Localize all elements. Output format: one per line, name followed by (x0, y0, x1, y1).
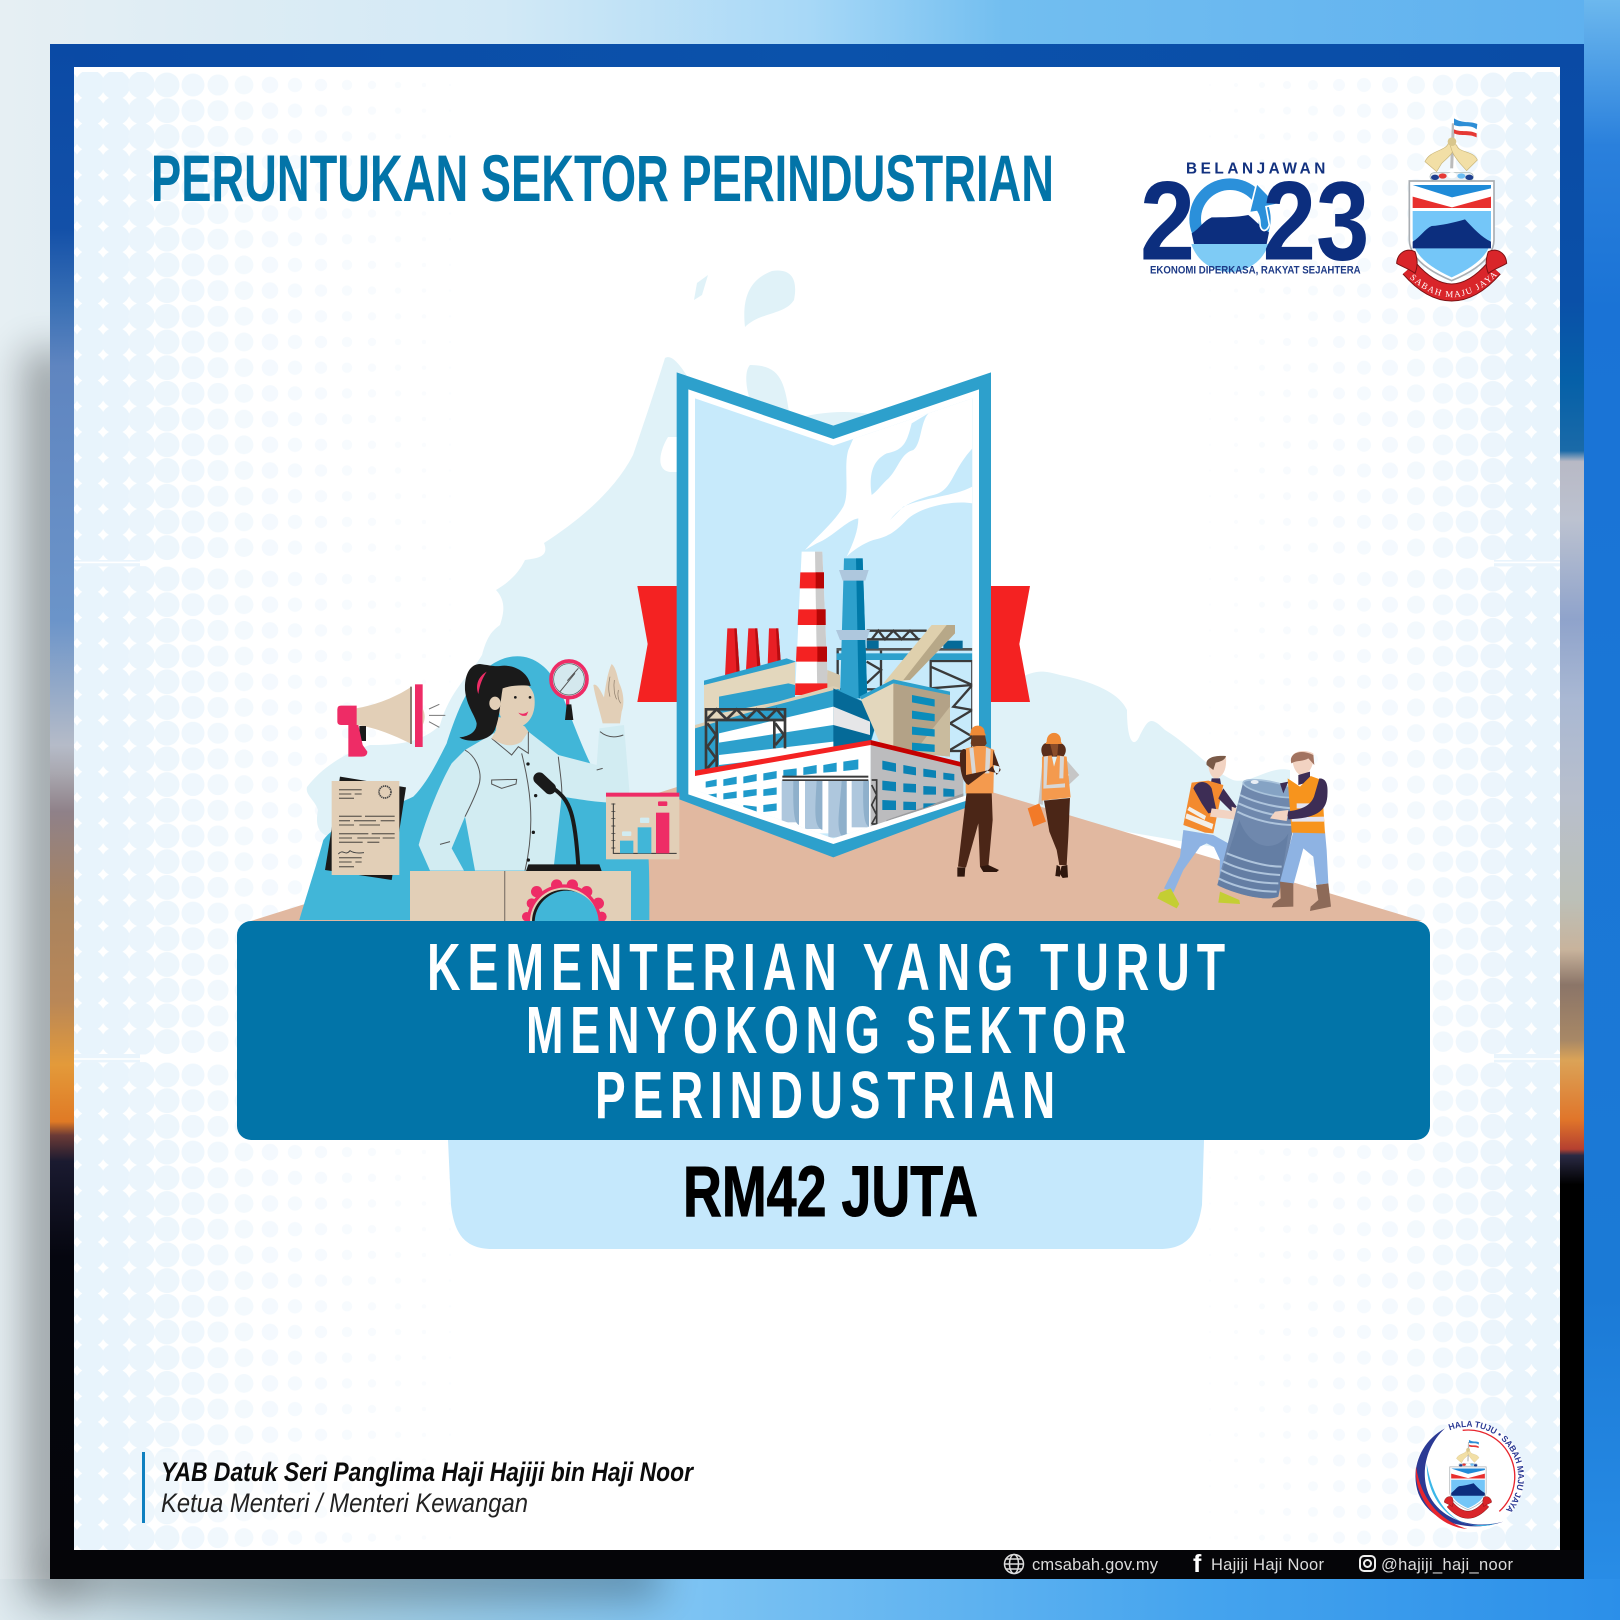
icon: globe (1004, 1554, 1024, 1574)
logo: Belanjawan 2023: EKONOMI DIPERKASA, RAKYAT SEJAHTERA (1150, 264, 1361, 276)
tan right building (860, 683, 906, 746)
emblem: Hala Tuju Sabah Maju Jaya (1414, 1420, 1524, 1532)
worker 3 (1157, 756, 1250, 908)
podium (410, 871, 631, 921)
blue chimney (840, 558, 867, 698)
gantry (706, 709, 785, 769)
logo: Belanjawan 2023: 2 (1140, 157, 1195, 283)
barrel (1217, 776, 1302, 898)
amount: RM42 JUTA (683, 1153, 978, 1232)
logo: Belanjawan 2023: BELANJAWAN (1186, 161, 1325, 178)
red stacks (725, 628, 781, 677)
silos (782, 781, 869, 837)
footer links: Hajiji Haji Noor (1211, 1556, 1324, 1574)
main banner (237, 921, 1430, 1140)
ribbon (637, 586, 1030, 702)
signature block: YAB Datuk Seri Panglima Haji Hajiji bin Haji Noor (161, 1457, 694, 1487)
teal backdrop (299, 656, 649, 920)
worker 1 (957, 726, 1001, 877)
footer links (1004, 1550, 1514, 1578)
footer links: cmsabah.gov.my (1032, 1556, 1159, 1574)
microphone (526, 778, 602, 871)
smoke (805, 395, 972, 557)
signature block: Ketua Menteri / Menteri Kewangan (161, 1488, 528, 1518)
factory shield with ribbon (637, 372, 1030, 857)
main banner: PERINDUSTRIAN (595, 1058, 1062, 1133)
main banner: MENYOKONG SEKTOR (526, 993, 1133, 1068)
tan building (704, 658, 795, 723)
shirt (419, 725, 629, 871)
footer links: @hajiji_haji_noor (1381, 1556, 1514, 1574)
worker 4 (1270, 751, 1331, 911)
emblem: Hala Tuju Sabah Maju Jaya: HALA TUJU • SABAH MAJU JAYA (1448, 1420, 1524, 1512)
woman presenter illustration (299, 656, 680, 921)
lower white building (695, 743, 871, 833)
workers illustration (957, 726, 1331, 911)
title: PERUNTUKAN SEKTOR PERINDUSTRIAN (151, 141, 1054, 215)
striped chimney (795, 552, 828, 695)
document (325, 777, 406, 880)
ground (251, 760, 1422, 921)
signature block (142, 1452, 694, 1523)
striped building (695, 687, 880, 772)
megaphone (337, 684, 445, 757)
icon: facebook: f (1193, 1550, 1202, 1578)
logo: Belanjawan 2023: 23 (1263, 157, 1369, 283)
icon: instagram (1360, 1556, 1375, 1571)
raised hand (593, 664, 623, 723)
logo: Sabah coat of arms (1396, 118, 1508, 302)
bar chart card (606, 793, 679, 859)
head and hair (492, 717, 528, 745)
magnifying glass (551, 661, 587, 720)
steel trusses (838, 631, 972, 751)
conveyor (883, 625, 955, 683)
map of Sabah backdrop (307, 271, 1290, 860)
factory scene (695, 395, 972, 838)
logo: Sabah coat of arms: SABAH MAJU JAYA (1410, 272, 1498, 298)
main banner: KEMENTERIAN YANG TURUT (427, 930, 1232, 1005)
worker 2 (1028, 733, 1079, 878)
light panel under banner (448, 1140, 1204, 1249)
sliver of white in the map (660, 437, 690, 472)
logo: Belanjawan 2023 (1140, 157, 1369, 283)
shield frame (677, 372, 991, 857)
